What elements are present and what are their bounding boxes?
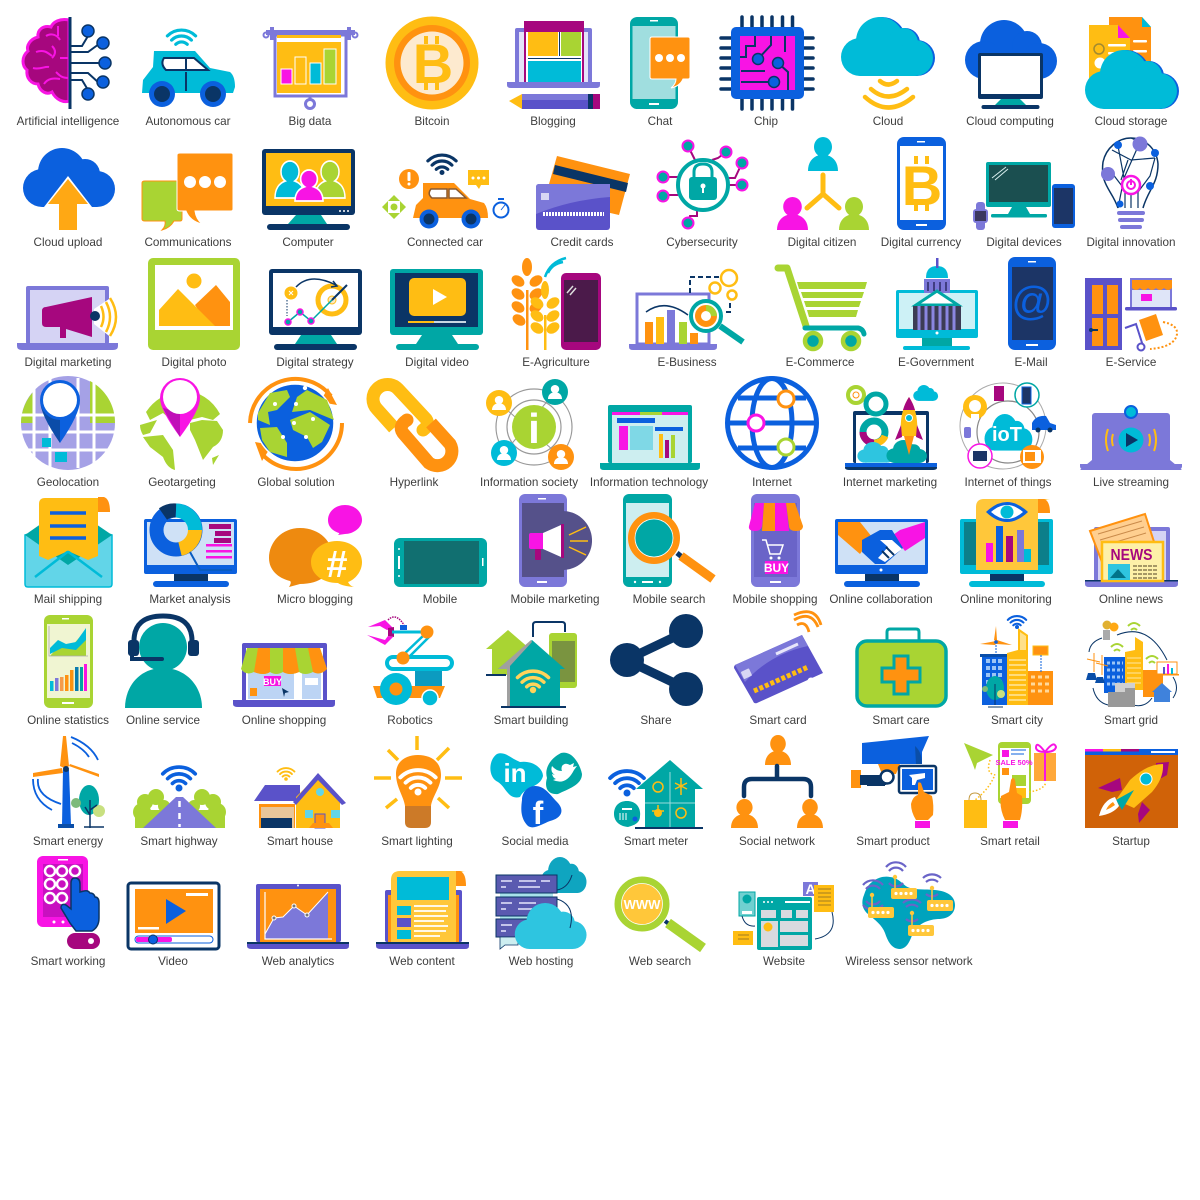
item: Mobile shopping [732, 494, 818, 606]
item: Geolocation [21, 376, 115, 489]
label: Cloud upload [34, 236, 102, 249]
icon: camera with touch screen [851, 736, 936, 828]
label: Smart energy [33, 835, 103, 848]
item: Smart product [851, 736, 936, 848]
icon: cloud with arrow [23, 148, 115, 230]
icon: magnifier with www: WWW [624, 897, 661, 912]
icon: monitor with play button [390, 269, 483, 350]
item: Robotics [367, 617, 452, 727]
item: Internet of things [960, 383, 1056, 489]
icon: phone with bubble [630, 17, 690, 109]
label: Communications [144, 236, 232, 249]
item: Smart grid [1086, 620, 1179, 727]
icon: laptop with dashboard [600, 405, 700, 470]
label: Cloud computing [966, 115, 1054, 128]
item: Smart energy [33, 736, 105, 848]
icon: speech bubbles [142, 153, 233, 230]
item: Online shopping [233, 643, 335, 727]
label: Mobile search [633, 593, 705, 606]
icon: circuit light bulb [1101, 136, 1159, 229]
icon: map circle with pin [21, 376, 115, 470]
label: Social media [502, 835, 569, 848]
label: Smart meter [624, 835, 688, 848]
label: Mobile [423, 593, 457, 606]
item: Cloud storage [1085, 17, 1179, 128]
item: Smart meter [610, 760, 703, 848]
icon: cloud and monitor [965, 20, 1057, 109]
label: Smart house [267, 835, 333, 848]
label: E-Commerce [786, 356, 854, 369]
icon: bitcoin coin: B [413, 32, 453, 95]
icon: phone with magnifier [623, 494, 713, 587]
label: Geotargeting [148, 476, 216, 489]
label: E-Government [898, 356, 975, 369]
icon: shopping cart [778, 268, 867, 349]
icon: car with sensors [382, 155, 508, 228]
label: Share [640, 714, 672, 727]
icon: contactless card [734, 612, 823, 703]
item: Digital devices [973, 162, 1075, 249]
icon: sensor nodes on map [862, 862, 955, 949]
icon: house with wifi [254, 768, 346, 828]
item: Online monitoring [960, 499, 1053, 606]
item: Communications [142, 153, 233, 249]
item: Social media [490, 753, 582, 848]
icon: car with wifi [142, 30, 235, 107]
label: Market analysis [149, 593, 231, 606]
item: Smart lighting [374, 736, 462, 848]
label: Blogging [530, 115, 576, 128]
label: Micro blogging [277, 593, 353, 606]
icon: monitor with handshake [835, 519, 928, 587]
label: Computer [282, 236, 334, 249]
label: Hyperlink [390, 476, 439, 489]
item: Digital innovation [1086, 136, 1176, 249]
icon: social network logos [490, 753, 582, 831]
label: Online statistics [27, 714, 109, 727]
icon: monitor with donut chart [144, 510, 237, 587]
icon: monitor with people [262, 149, 355, 230]
icon: phone with megaphone [519, 494, 592, 587]
label: Connected car [407, 236, 483, 249]
icon: phone with charts [44, 615, 93, 708]
item: E-Business [629, 270, 743, 369]
label: Smart card [749, 714, 807, 727]
label: Mobile shopping [732, 593, 818, 606]
item: Share [610, 614, 703, 727]
item: Blogging [507, 21, 600, 128]
icon: globe wireframe [727, 378, 817, 468]
item: Geotargeting [140, 378, 223, 489]
label: Web content [389, 955, 455, 968]
item: Online collaboration [829, 519, 933, 606]
label: E-Service [1106, 356, 1156, 369]
label: Smart grid [1104, 714, 1158, 727]
icon: phone with storefront: BUY [764, 561, 789, 575]
label: Social network [739, 835, 815, 848]
item: Online service [125, 616, 202, 727]
icon: monitor with capitol building [896, 258, 978, 350]
icon: headset operator [125, 616, 202, 708]
item: Video [128, 883, 219, 968]
icon: city with wind turbine [980, 616, 1053, 707]
item: Wireless sensor network [845, 862, 973, 968]
item: Big data [264, 27, 358, 128]
label: Smart care [872, 714, 930, 727]
icon: documents and cloud [1085, 17, 1179, 109]
label: Bitcoin [414, 115, 450, 128]
icon: video player [128, 883, 219, 949]
item: Web content [376, 871, 469, 968]
label: Digital strategy [276, 356, 354, 369]
label: Credit cards [550, 236, 614, 249]
label: Smart highway [140, 835, 218, 848]
item: Chat [630, 17, 690, 128]
item: Chip [721, 17, 813, 128]
item: Hyperlink [373, 384, 452, 489]
icon: phone with bitcoin: B [902, 154, 942, 217]
item: Cloud upload [23, 148, 115, 249]
icon: smart home panel [610, 760, 703, 829]
label: Digital citizen [788, 236, 856, 249]
icon: cloud and signal [841, 17, 935, 108]
label: Chat [648, 115, 673, 128]
item: Digital strategy [269, 269, 362, 369]
label: Online shopping [242, 714, 326, 727]
icon: globe with pin [140, 378, 223, 470]
label: Web analytics [262, 955, 334, 968]
item: Online statistics [27, 615, 109, 727]
item: Cloud computing [965, 20, 1057, 128]
item: Smart retail [964, 742, 1056, 848]
label: Digital marketing [24, 356, 112, 369]
label: Geolocation [37, 476, 99, 489]
item: Smart highway [133, 767, 226, 848]
item: Mobile search [623, 494, 713, 606]
icon: stacked bank cards [536, 156, 630, 230]
icon: wind turbine and tree [33, 736, 105, 828]
item: Market analysis [144, 510, 237, 606]
icon: laptop and pencil [507, 21, 600, 109]
item: Smart care [857, 629, 946, 727]
item: Computer [262, 149, 355, 249]
icon: web page layout with cards: A [805, 881, 816, 897]
item: Social network [731, 735, 823, 848]
icon: laptop with megaphone [17, 286, 118, 350]
label: Cloud storage [1095, 115, 1167, 128]
label: Mail shipping [34, 593, 102, 606]
item: E-Service [1085, 278, 1177, 369]
label: Smart retail [980, 835, 1040, 848]
icon: org chart of people [731, 735, 823, 828]
label: Startup [1112, 835, 1150, 848]
item: Credit cards [536, 156, 630, 249]
icon: laptop with newspaper: NEWS [1110, 547, 1153, 564]
icon: three connected people [777, 137, 869, 230]
icon: processor chip [721, 17, 813, 109]
label: E-Business [657, 356, 717, 369]
item: Internet marketing [843, 385, 938, 489]
icon: info circle and people: i [528, 405, 540, 452]
item: E-Agriculture [509, 258, 601, 369]
icon: laptop with play button [1080, 406, 1182, 470]
label: E-Agriculture [522, 356, 590, 369]
icon: share nodes [610, 614, 703, 706]
item: E-Commerce [778, 268, 867, 369]
icon: brain and circuit [23, 17, 111, 109]
icon: bulb with rays [374, 736, 462, 828]
label: Smart product [856, 835, 930, 848]
label: Mobile marketing [510, 593, 600, 606]
label: Web search [629, 955, 691, 968]
label: Smart working [31, 955, 105, 968]
item: Artificial intelligence [17, 17, 119, 128]
item: Internet [727, 378, 817, 489]
icon: servers and clouds [496, 857, 587, 949]
item: Information society [480, 379, 578, 489]
label: Digital devices [986, 236, 1062, 249]
icon: robot arm on wheels [367, 617, 452, 706]
label: Website [763, 955, 805, 968]
label: Internet marketing [843, 476, 937, 489]
item: Global solution [250, 379, 342, 489]
label: Live streaming [1093, 476, 1169, 489]
icon: wheat and phone [509, 258, 601, 350]
label: Online collaboration [829, 593, 933, 606]
item: Connected car [382, 155, 508, 249]
icon: padlock network [658, 140, 748, 228]
icon: monitor and report with eye [960, 499, 1053, 587]
item: Website [733, 881, 834, 968]
label: Information society [480, 476, 578, 489]
icon: houses with phone [486, 622, 577, 708]
label: Digital currency [881, 236, 961, 249]
label: Online news [1099, 593, 1163, 606]
item: Digital marketing [17, 286, 118, 369]
label: Robotics [387, 714, 433, 727]
item: Bitcoin [386, 16, 478, 128]
item: Smart city [980, 616, 1053, 727]
item: Mobile marketing [510, 494, 600, 606]
item: Smart house [254, 768, 346, 848]
icon: connected power grid [1086, 620, 1179, 707]
item: Cybersecurity [658, 140, 748, 249]
label: Chip [754, 115, 779, 128]
item: Smart card [734, 612, 823, 727]
item: Information technology [590, 405, 708, 489]
icon: laptop storefront: BUY [263, 677, 282, 687]
icon: social network logos: f [533, 795, 544, 831]
icon: door, shop and delivery [1085, 278, 1177, 350]
label: Wireless sensor network [845, 955, 973, 968]
item: E-Government [896, 258, 978, 369]
item: Startup [1085, 749, 1178, 848]
label: Web hosting [509, 955, 573, 968]
item: Cloud [841, 17, 935, 128]
label: E-Mail [1014, 356, 1048, 369]
icon: first-aid kit [857, 629, 946, 706]
label: Online service [126, 714, 200, 727]
label: Artificial intelligence [17, 115, 119, 128]
label: Digital innovation [1086, 236, 1176, 249]
icon: monitor, phone and watch [973, 162, 1075, 230]
label: Online monitoring [960, 593, 1052, 606]
label: Global solution [257, 476, 335, 489]
icon: monitor with target [269, 269, 362, 350]
item: Smart building [486, 622, 577, 727]
item: Mail shipping [25, 497, 112, 606]
label: Digital video [405, 356, 469, 369]
icon: laptop with area chart [247, 884, 349, 949]
icon: envelope with letter [25, 497, 112, 587]
label: Video [158, 955, 188, 968]
label: Smart building [494, 714, 568, 727]
label: Smart city [991, 714, 1043, 727]
icon: window with rocket [1085, 749, 1178, 828]
label: Autonomous car [145, 115, 231, 128]
item: Online news [1085, 514, 1178, 606]
icon: road with wifi [133, 767, 226, 828]
icon: laptop with rocket [845, 385, 938, 470]
item: Web hosting [496, 857, 587, 968]
icon: three speech bubbles: # [326, 544, 348, 586]
icon: phone shopping scene: SALE 50% [995, 758, 1033, 767]
item: Autonomous car [142, 30, 235, 128]
label: Cloud [873, 115, 903, 128]
label: Big data [289, 115, 332, 128]
item: Mobile [394, 538, 487, 606]
item: Digital currency [881, 137, 961, 249]
icon: laptop with chart and magnifier [629, 270, 743, 350]
label: Information technology [590, 476, 708, 489]
icon: social network logos: in [503, 758, 527, 788]
icon: presentation board [264, 27, 358, 108]
label: Internet of things [964, 476, 1052, 489]
icon: framed picture [148, 258, 240, 350]
item: Micro blogging [269, 505, 362, 606]
icon: phone keypad and hand [37, 856, 100, 949]
item: E-Mail [1008, 257, 1056, 369]
item: Smart working [31, 856, 105, 968]
item: Digital photo [148, 258, 240, 369]
icon: phone with at sign: @ [1011, 278, 1053, 324]
icon: laptop with web page [376, 871, 469, 949]
item: Web analytics [247, 884, 349, 968]
label: Smart lighting [381, 835, 453, 848]
icon: landscape phone [394, 538, 487, 587]
item: Web search [618, 880, 703, 968]
item: Live streaming [1080, 406, 1182, 489]
icon: chain links [373, 384, 452, 466]
label: Digital photo [162, 356, 227, 369]
item: Digital citizen [777, 137, 869, 249]
icon: IoT cloud and devices: ioT [992, 424, 1022, 446]
label: Cybersecurity [666, 236, 738, 249]
icon: globe with orange arrows [250, 379, 342, 469]
item: Digital video [390, 269, 483, 369]
label: Internet [752, 476, 793, 489]
